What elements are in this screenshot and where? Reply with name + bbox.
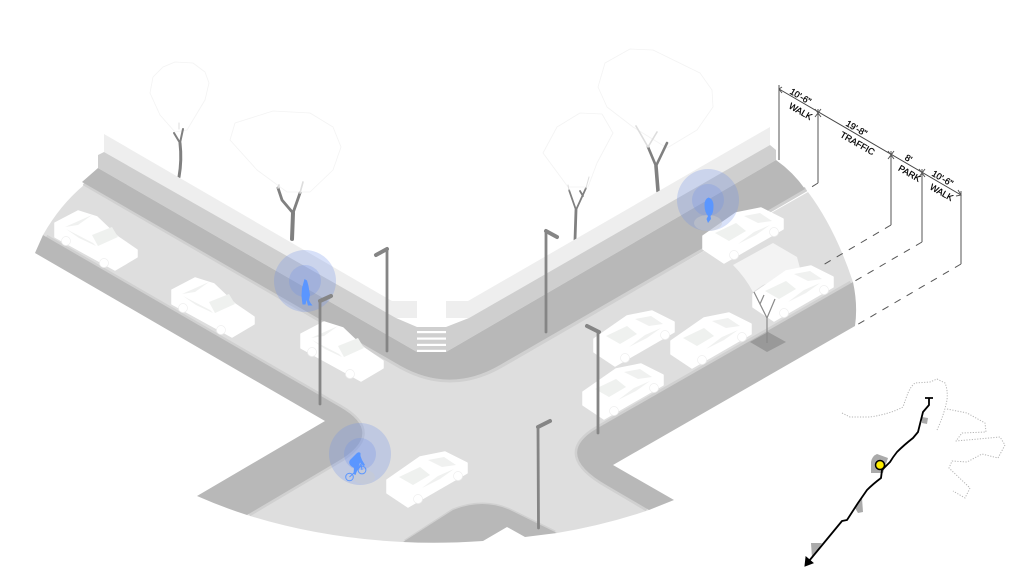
pale crossing patch <box>733 243 801 292</box>
tree 4 <box>636 126 667 191</box>
road surface <box>43 185 853 542</box>
car 3 <box>301 322 383 381</box>
tree 1 <box>174 123 183 177</box>
locator map <box>805 379 1005 566</box>
tree 2 <box>278 182 303 239</box>
car 4 <box>387 452 467 507</box>
lamp 1 <box>376 249 387 351</box>
tree crown outlines <box>150 49 713 192</box>
label: walk 10'-6": 10'-6" <box>788 86 813 106</box>
car 5 <box>703 208 783 263</box>
label: TRAFFIC: TRAFFIC <box>839 130 877 157</box>
dimension lines <box>779 85 961 326</box>
park patches <box>811 417 928 558</box>
car 8 <box>671 313 751 368</box>
upper sidewalk <box>82 160 805 380</box>
tree 3 <box>568 177 589 240</box>
label: park 8': 8' <box>903 152 914 165</box>
lower-left sidewalk <box>35 235 362 515</box>
label: traffic 19'-8": 19'-8" <box>844 118 869 138</box>
route arrowhead <box>805 557 813 566</box>
lamp 2 <box>320 296 331 404</box>
street lamps <box>320 231 599 528</box>
bottom sidewalk <box>403 504 557 543</box>
planting band <box>98 145 776 352</box>
crosswalk <box>417 331 446 352</box>
label: WALK right: WALK <box>928 182 955 203</box>
pedestrian with radius: left <box>274 250 336 312</box>
wall: left <box>104 134 417 318</box>
wall: right <box>446 127 770 318</box>
pedestrian with radius: right <box>677 169 739 231</box>
dimension labels <box>787 86 955 203</box>
car 2 <box>172 278 254 337</box>
lamp 4 <box>587 326 599 433</box>
curbs <box>46 183 851 541</box>
dotted neighbouring routes <box>842 379 1005 498</box>
lamp 3 <box>546 231 557 332</box>
label: walk 10'-6" right: 10'-6" <box>930 168 955 188</box>
label: WALK: WALK <box>787 101 814 122</box>
car 9 <box>583 364 663 419</box>
tree trunks behind the wall <box>174 123 667 240</box>
lamp 5 <box>538 421 550 528</box>
cyclist with radius <box>329 423 391 485</box>
lower-right sidewalk <box>577 282 856 510</box>
car 6 <box>753 266 833 321</box>
location marker <box>876 460 884 470</box>
street tree on planter <box>750 292 786 352</box>
car 7 <box>594 311 674 366</box>
label: PARK: PARK <box>897 163 922 184</box>
car 1 <box>55 211 137 270</box>
main route <box>809 398 933 561</box>
